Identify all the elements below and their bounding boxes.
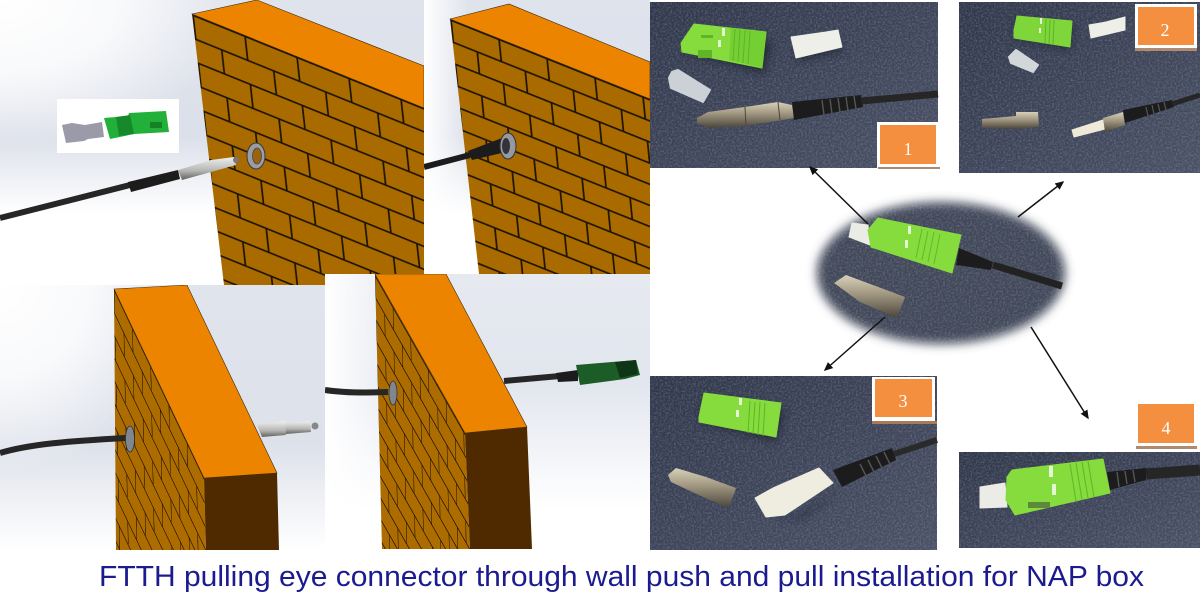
green housing [1006,459,1110,515]
metal pulling eye [697,102,794,128]
brick wall end face [204,473,279,550]
arrow to photo 4 [1031,327,1088,418]
cable and ring [0,426,134,453]
wall ring hole [247,143,265,169]
white inner connector [755,468,840,520]
brick wall top face [375,274,527,433]
photo 3 with white connector exposed [650,376,937,550]
panel: wall side view, assembled connector through [325,274,650,550]
number box 1: 1 [904,139,912,159]
brick wall front face [114,289,206,550]
brick wall front face [192,14,424,285]
cable and boot [833,440,937,487]
brick wall front face [375,274,470,549]
arrow to photo 1 [810,167,868,224]
white inner housing [791,30,844,62]
number box 3 [872,377,937,424]
white cap [980,483,1007,508]
green housing [699,393,785,442]
panel: wall view, connector inserted [424,0,650,274]
photo 2 with connector disassembled [959,2,1200,173]
number box 1 [877,122,940,169]
white ferrule cap [849,223,870,245]
panel: wall side view, metal pulling eye through [0,285,325,550]
panel: wall view, connector approaching [0,0,424,285]
green housing [681,24,772,74]
inset: connector parts [57,99,179,153]
clear cap [669,70,710,102]
central oval photo of connector [815,200,1067,346]
photo 4 with assembled connector [959,452,1200,548]
number box 4 [1136,403,1197,449]
cable and green connector [504,360,640,385]
metal pulling eye [668,468,736,508]
arrow to photo 2 [1018,182,1063,217]
brick wall front face [450,19,650,274]
brick wall top face [192,0,424,108]
cable and ring [325,381,397,405]
brick wall end face [465,427,532,549]
green housing [868,218,961,273]
metal pulling eye [257,421,318,437]
green housing [1014,16,1074,50]
metal pulling eye [982,112,1039,129]
clear cap [1009,50,1038,72]
boot and cable [956,248,1062,286]
brick wall top face [450,4,650,99]
brick wall top face [114,285,277,478]
arrow to photo 3 [825,317,885,370]
ferrule assembly [1072,95,1200,137]
number box 3: 3 [898,391,908,411]
cable with pulling eye [0,157,239,218]
number box 2 [1135,4,1197,51]
white inner housing [1089,17,1125,38]
number box 4: 4 [1162,418,1170,438]
metal pulling eye [834,275,905,318]
number box 2: 2 [1160,20,1170,40]
cable and boot [792,94,938,120]
photo 1 with connector on dark surface [650,2,940,169]
cable and boot [1107,468,1200,490]
title: FTTH pulling eye connector through wall push and pull installation for NAP box [99,561,1144,593]
cable into ring [424,133,516,167]
